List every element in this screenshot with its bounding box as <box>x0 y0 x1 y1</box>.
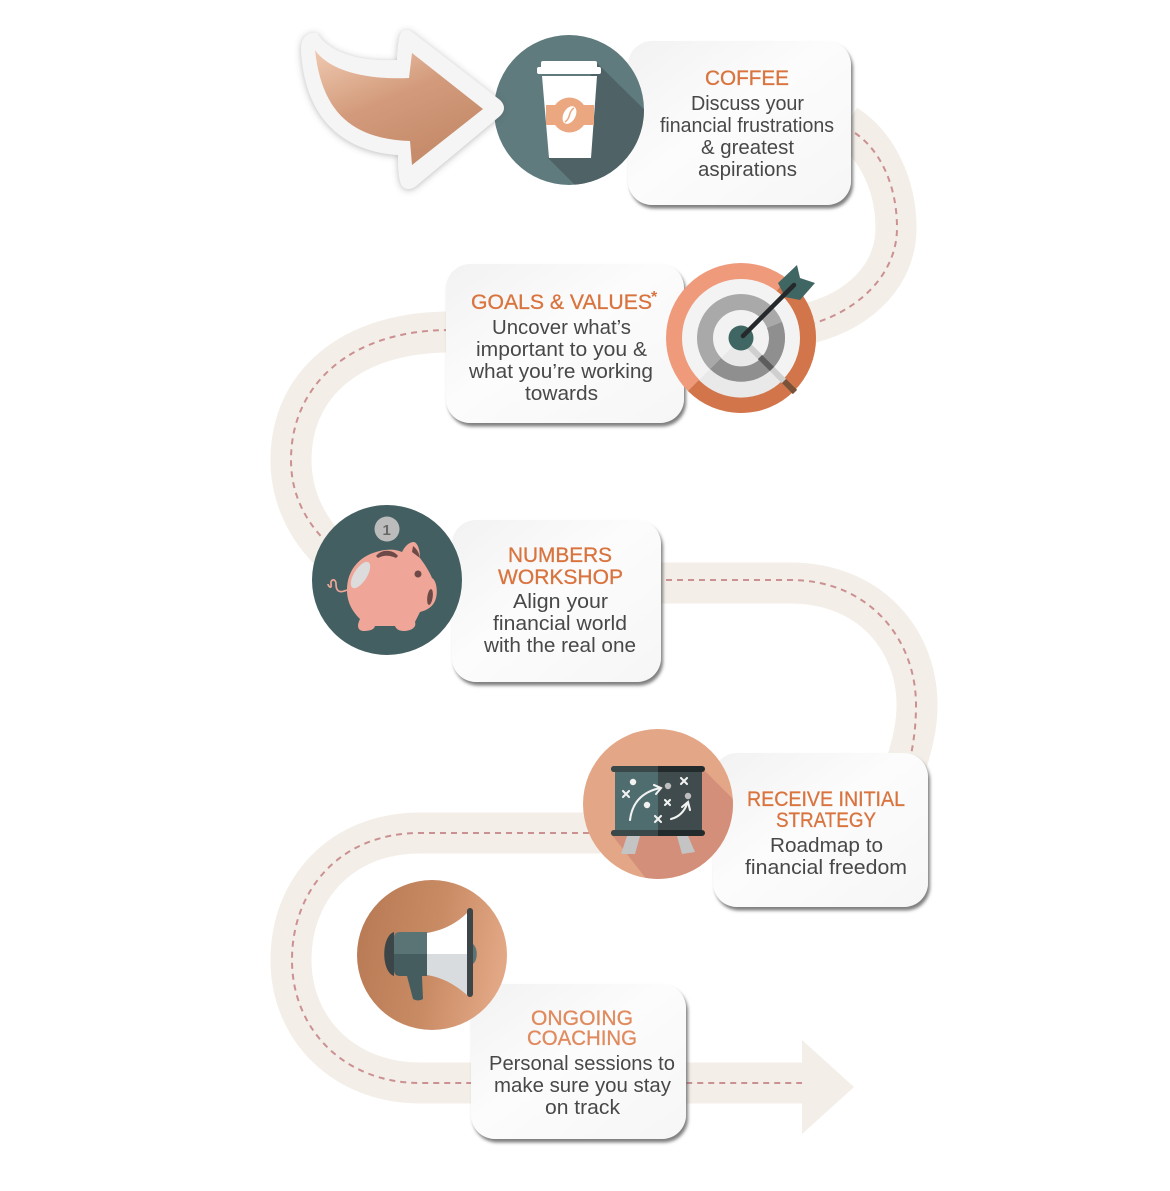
text: numbers description <box>483 591 636 657</box>
heading: coffee: COFFEE <box>705 67 789 90</box>
text: goals description: towards <box>525 383 598 405</box>
text: coaching description <box>489 1053 675 1119</box>
text: strategy description <box>745 835 907 879</box>
arrow: copper start arrow <box>301 30 504 189</box>
coin: 1 <box>382 522 391 539</box>
text: strategy description: financial freedom <box>745 857 907 879</box>
heading: numbers workshop: NUMBERS <box>508 544 612 567</box>
text: coffee description <box>660 93 834 181</box>
winding road path <box>291 125 917 1134</box>
panel: numbers workshop card <box>452 520 661 682</box>
text: goals description: what you’re working <box>468 361 653 383</box>
heading: goals and values: * <box>651 289 658 306</box>
text: coaching description: on track <box>545 1097 621 1119</box>
text: numbers description: with the real one <box>483 635 636 657</box>
heading: receive initial strategy <box>747 788 905 832</box>
icon: piggy bank <box>312 505 462 655</box>
heading: goals and values: GOALS & VALUES <box>471 291 652 314</box>
text: coaching description: Personal sessions to <box>489 1053 675 1075</box>
dashed centre line <box>291 133 916 1083</box>
heading: ongoing coaching: COACHING <box>527 1027 637 1050</box>
text: coffee description: & greatest <box>701 137 794 159</box>
text: coffee description: Discuss your <box>691 93 804 115</box>
heading: ongoing coaching: ONGOING <box>531 1007 633 1030</box>
heading: ongoing coaching <box>527 1007 637 1050</box>
text: coffee description: aspirations <box>698 159 797 181</box>
panel: ongoing coaching card <box>471 984 686 1139</box>
heading: receive initial strategy: STRATEGY <box>776 809 876 832</box>
text: numbers description: financial world <box>493 613 627 635</box>
plays on board <box>623 778 691 822</box>
road end arrowhead <box>802 1040 854 1134</box>
target shaded lower wedge <box>699 322 795 398</box>
icon: target with arrow <box>666 263 816 413</box>
heading: numbers workshop: WORKSHOP <box>498 566 623 589</box>
text: goals description: important to you & <box>476 339 648 361</box>
board legs <box>621 836 695 854</box>
icon: coffee cup <box>494 35 644 185</box>
panel: receive initial strategy card <box>713 753 928 907</box>
panel: coffee card <box>628 41 851 205</box>
heading: numbers workshop <box>498 544 623 589</box>
panel: goals and values card <box>446 264 684 423</box>
coin <box>374 516 400 542</box>
text: strategy description: Roadmap to <box>770 835 883 857</box>
text: goals description: Uncover what’s <box>492 317 631 339</box>
text: coffee description: financial frustrations <box>660 115 834 137</box>
text: coaching description: make sure you stay <box>494 1075 671 1097</box>
text: numbers description: Align your <box>513 591 608 613</box>
text: goals description <box>468 317 653 405</box>
icon: strategy board <box>583 729 733 879</box>
heading: receive initial strategy: RECEIVE INITIAL <box>747 788 905 811</box>
icon: megaphone <box>357 880 507 1030</box>
